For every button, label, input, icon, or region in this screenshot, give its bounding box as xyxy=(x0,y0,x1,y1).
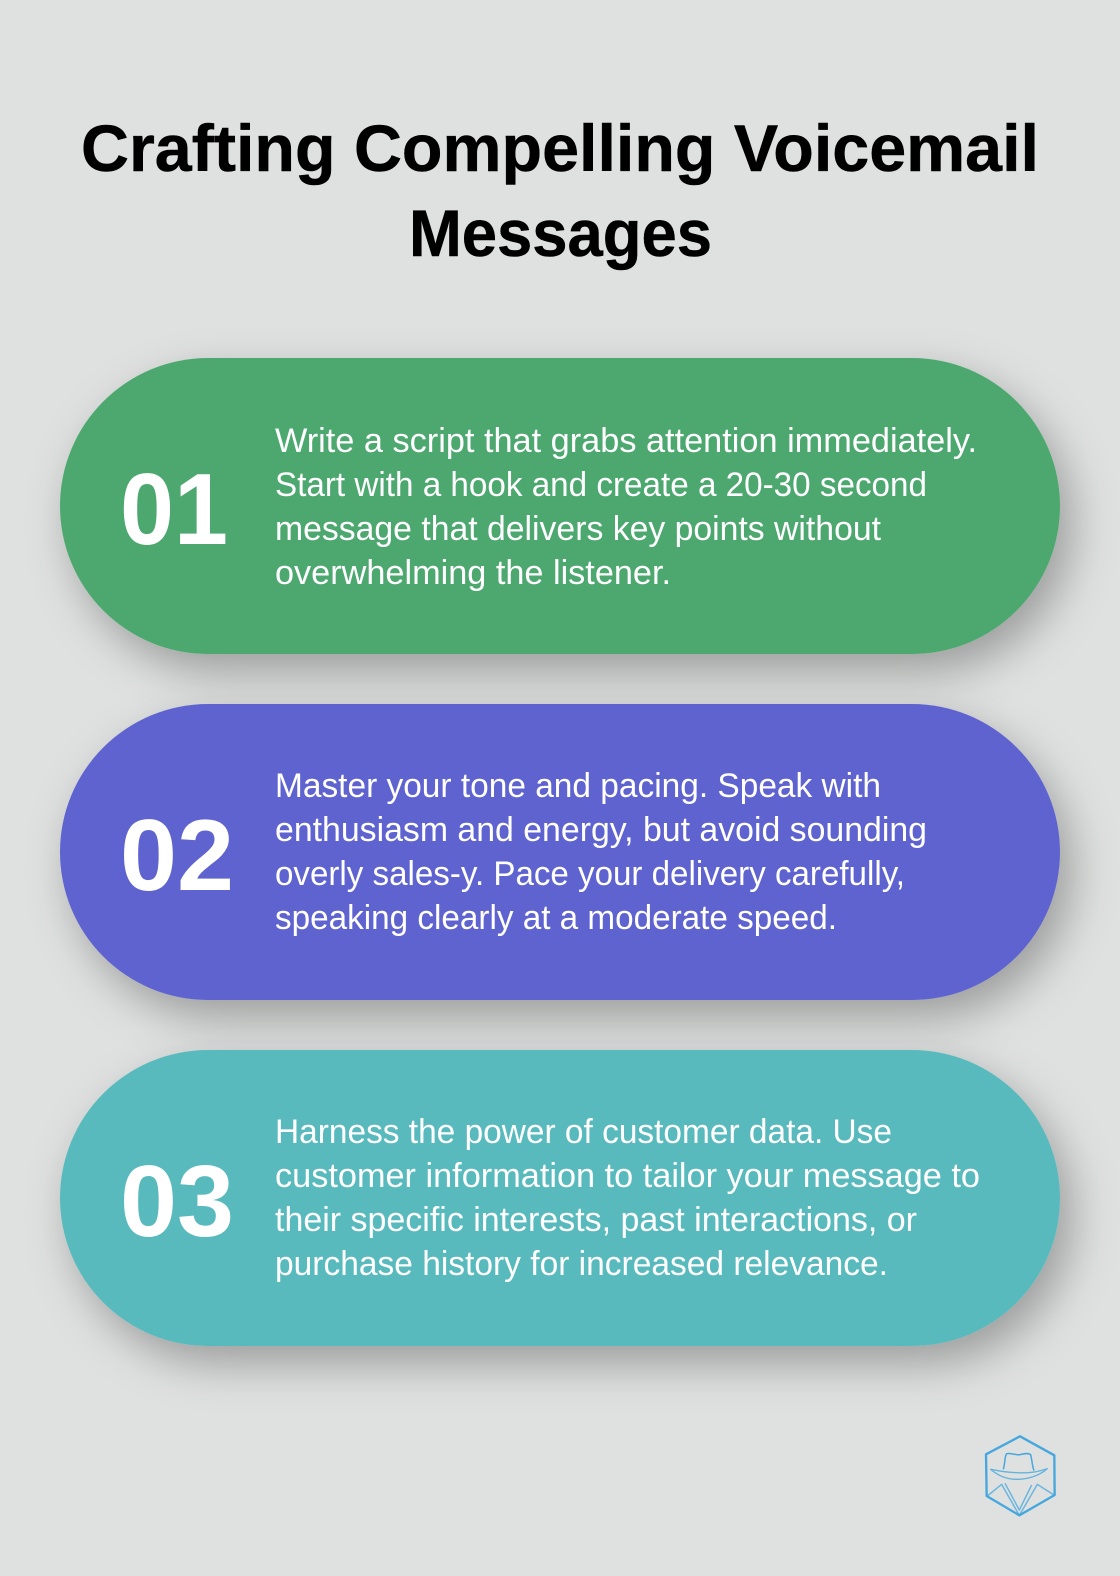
panel: step 01 xyxy=(60,358,1060,654)
text: step 02 description: enthusiasm and energy, but avoid sounding xyxy=(275,811,927,849)
title: Messages xyxy=(409,196,712,270)
number 01: 01 xyxy=(120,454,228,566)
text: step 03 description: their specific interests, past interactions, or xyxy=(275,1201,917,1239)
pill background purple xyxy=(60,704,1060,1000)
panel: step 03 xyxy=(60,1050,1060,1346)
text: step 02 description: speaking clearly at a moderate speed. xyxy=(275,899,837,937)
text: step 03 description xyxy=(275,1113,980,1283)
text: step 03 description: customer information to tailor your message to xyxy=(275,1157,980,1195)
title: Crafting Compelling Voicemail xyxy=(81,111,1039,185)
text: step 02 description: overly sales-y. Pace your delivery carefully, xyxy=(275,855,905,893)
number 03: 03 xyxy=(120,1146,234,1258)
icon: spy hat logo xyxy=(986,1436,1055,1515)
text: step 01 description: overwhelming the listener. xyxy=(275,554,671,592)
text: step 01 description: Start with a hook and create a 20-30 second xyxy=(275,466,927,504)
text: step 02 description: Master your tone and pacing. Speak with xyxy=(275,767,881,805)
panel: step 02 xyxy=(60,704,1060,1000)
text: step 01 description xyxy=(275,422,977,592)
pill background teal xyxy=(60,1050,1060,1346)
text: step 03 description: purchase history for increased relevance. xyxy=(275,1245,888,1283)
text: step 01 description: message that delivers key points without xyxy=(275,510,882,548)
text: step 02 description xyxy=(275,767,927,937)
text: step 03 description: Harness the power of customer data. Use xyxy=(275,1113,892,1151)
pill background green xyxy=(60,358,1060,654)
text: step 01 description: Write a script that grabs attention immediately. xyxy=(275,422,977,460)
number 02: 02 xyxy=(120,800,234,912)
title xyxy=(81,111,1039,270)
